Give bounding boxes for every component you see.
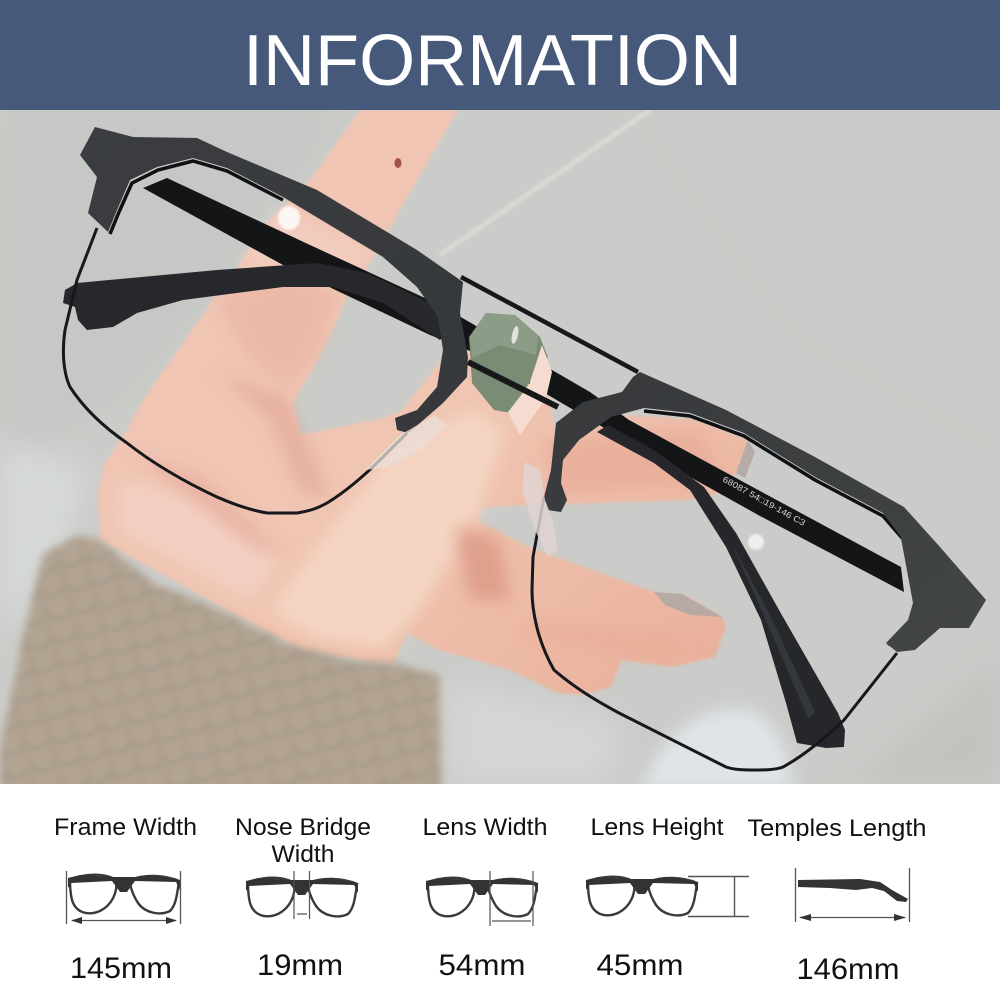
right lens wire [532, 497, 897, 770]
spec: temples length [748, 815, 926, 986]
spec: nose bridge width: Nose Bridge [235, 814, 371, 841]
spec: nose bridge width: 19mm [257, 949, 343, 982]
icon: glasses with lens height arrow [586, 876, 749, 916]
sweater sleeve [0, 535, 442, 800]
photo background: marble surface [0, 110, 1000, 790]
temple imprint: 68087 54□19-146 C3 [721, 474, 807, 528]
spec: lens height: 45mm [596, 949, 684, 982]
spec: lens height: Lens Height [590, 814, 724, 841]
glasses [63, 127, 986, 770]
shading: palm creases and thumb base [120, 205, 720, 660]
spec: lens width: 54mm [438, 949, 526, 982]
fingertip details [394, 158, 755, 617]
temple arm: left folded [63, 263, 442, 340]
left brow [80, 127, 468, 433]
spec: temples length: Temples Length [748, 815, 926, 842]
icon: glasses with bridge arrow [246, 871, 358, 919]
double bridge [461, 277, 638, 407]
hand [98, 110, 755, 695]
icon: temple arm with length arrow [796, 868, 910, 922]
spec: lens width [422, 814, 548, 982]
header band [0, 0, 1000, 110]
photo: hand holding glasses [0, 110, 1000, 800]
blurred shoe in background [640, 708, 795, 790]
spec: nose bridge width [235, 814, 371, 982]
nose pad: right [522, 462, 558, 557]
temple arm: upper rear with imprint [143, 178, 904, 592]
spec: frame width: 145mm [70, 952, 172, 985]
spec: frame width: Frame Width [54, 814, 197, 841]
thumb nail: green [469, 313, 552, 435]
left lens wire [63, 228, 407, 513]
spec: temples length: 146mm [796, 953, 900, 986]
temple arm: right folded [597, 425, 845, 748]
inner rim of frame [110, 161, 915, 645]
spec: frame width [54, 814, 197, 985]
spec: lens width: Lens Width [422, 814, 548, 841]
icon: glasses with lens width arrow [426, 871, 538, 926]
spec: lens height [586, 814, 749, 982]
nose pad: left [365, 415, 447, 470]
spec: nose bridge width: Width [272, 841, 334, 868]
right brow [544, 372, 986, 652]
icon: glasses with frame width arrow [66, 871, 180, 924]
title: INFORMATION [243, 21, 742, 101]
lens glare [278, 206, 764, 550]
